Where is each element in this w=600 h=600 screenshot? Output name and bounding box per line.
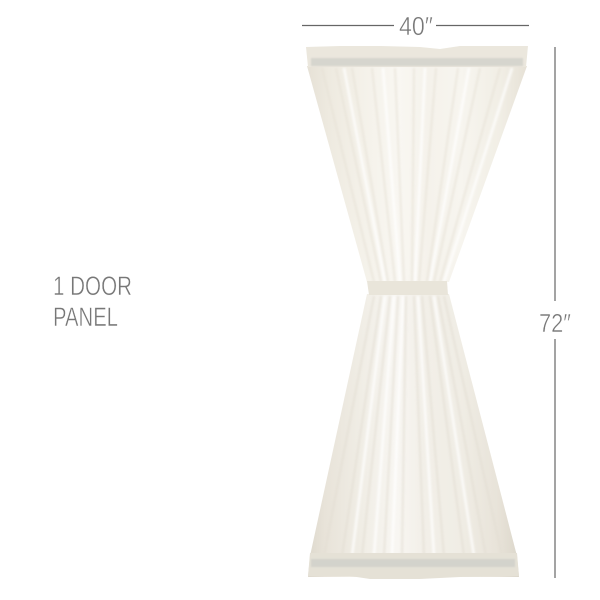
lower curtain fabric (308, 294, 519, 577)
top rod pocket (306, 46, 528, 67)
label: 1 door panel: 1 DOOR (53, 271, 132, 301)
width dimension: 40 inches: 40″ (399, 11, 433, 41)
bottom hem (308, 553, 519, 579)
label: 1 door panel: PANEL (53, 302, 118, 332)
tieback band (367, 281, 448, 295)
label: 1 door panel (53, 271, 132, 332)
curtain panel (306, 46, 528, 579)
upper curtain fabric (307, 66, 527, 282)
height dimension: 72 inches: 72″ (539, 308, 571, 338)
